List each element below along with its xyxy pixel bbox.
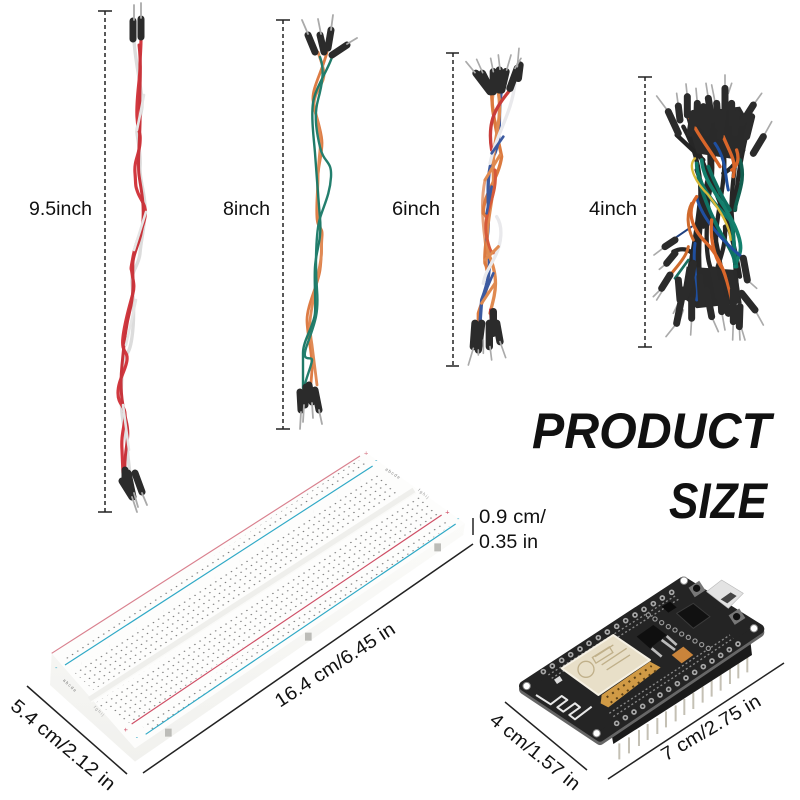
polarity signs: - [55,663,58,672]
antenna trace [536,695,592,719]
bottom cluster mass [682,267,742,308]
label: 4inch: 4inch [589,199,637,220]
heading: product size: PRODUCT [532,403,775,459]
silkscreen outlined pad row [648,615,708,648]
polarity signs: + [445,507,450,516]
column letters: a b c d e [62,678,78,693]
wire bundle: 6 inch multi colour [466,48,521,365]
wire bundle: 9.5 inch red and white [118,3,147,512]
breadboard dimension: height: 0.9 cm/ [479,507,547,528]
dimension line: 4 inch [638,77,652,347]
wire bundle: 4 inch dense multi colour [653,75,772,340]
polarity signs [55,448,460,741]
shield markings [578,645,630,677]
small transistor [662,602,677,613]
PCB edge [524,585,759,740]
polarity signs: - [375,456,378,465]
breadboard side faces [50,523,465,762]
top cluster mass [685,107,752,160]
pin header [612,643,752,744]
breadboard top face [52,452,465,748]
pins [619,656,747,759]
column letters: a b c d e [384,467,402,480]
column letters: f g h i j [417,488,430,500]
label: 9.5inch: 9.5inch [29,199,92,220]
power rail lines [52,456,456,734]
silkscreen labels [548,595,733,717]
reset button [689,581,705,597]
hole grid [63,460,452,732]
voltage regulator [637,625,677,657]
breadboard dimension: height [473,507,547,553]
wire bundle: 8 inch orange and green [300,15,357,429]
row number marks [82,480,361,663]
column letters: f g h i j [93,705,105,717]
breadboard dimension: height: 0.35 in [479,532,538,553]
NodeMCU dimension: length [608,663,784,779]
column letters [62,467,430,717]
breadboard dimension: width: 5.4 cm/2.12 in [6,696,119,795]
pads, top row [543,592,672,672]
ESP module shield [562,635,650,695]
dark cable core [673,127,747,303]
polarity signs: - [136,732,139,741]
heading: product size: SIZE [669,473,768,529]
NodeMCU board [523,577,759,759]
NodeMCU dimension: width: 4 cm/1.57 in [485,710,584,795]
label: 8inch: 8inch [223,199,270,220]
micro USB port [707,580,743,608]
centre groove [89,490,416,702]
polarity signs: + [364,448,368,457]
ESP module pad strip [601,662,661,707]
dimension line: 6 inch [446,53,459,366]
breadboard dimension: length [143,544,473,773]
pads, bottom row [617,644,738,723]
tantalum capacitor [672,647,693,663]
ESP module pad holes [607,666,657,703]
LED [554,676,563,684]
dimension line: 9.5 inch [98,11,112,512]
breadboard dimension: length: 16.4 cm/6.45 in [271,619,399,712]
NodeMCU dimension: length: 7 cm/2.75 in [658,691,765,766]
polarity signs: + [124,725,128,734]
heading: product size [532,403,775,529]
USB chip [677,603,710,628]
label: 6inch: 6inch [392,199,440,220]
flash button [729,608,745,625]
polarity signs: - [457,514,460,523]
PCB top [524,582,759,737]
mounting holes [523,577,758,737]
dimension line: 8 inch [276,20,290,429]
side notches [168,543,438,737]
breadboard [50,448,465,762]
